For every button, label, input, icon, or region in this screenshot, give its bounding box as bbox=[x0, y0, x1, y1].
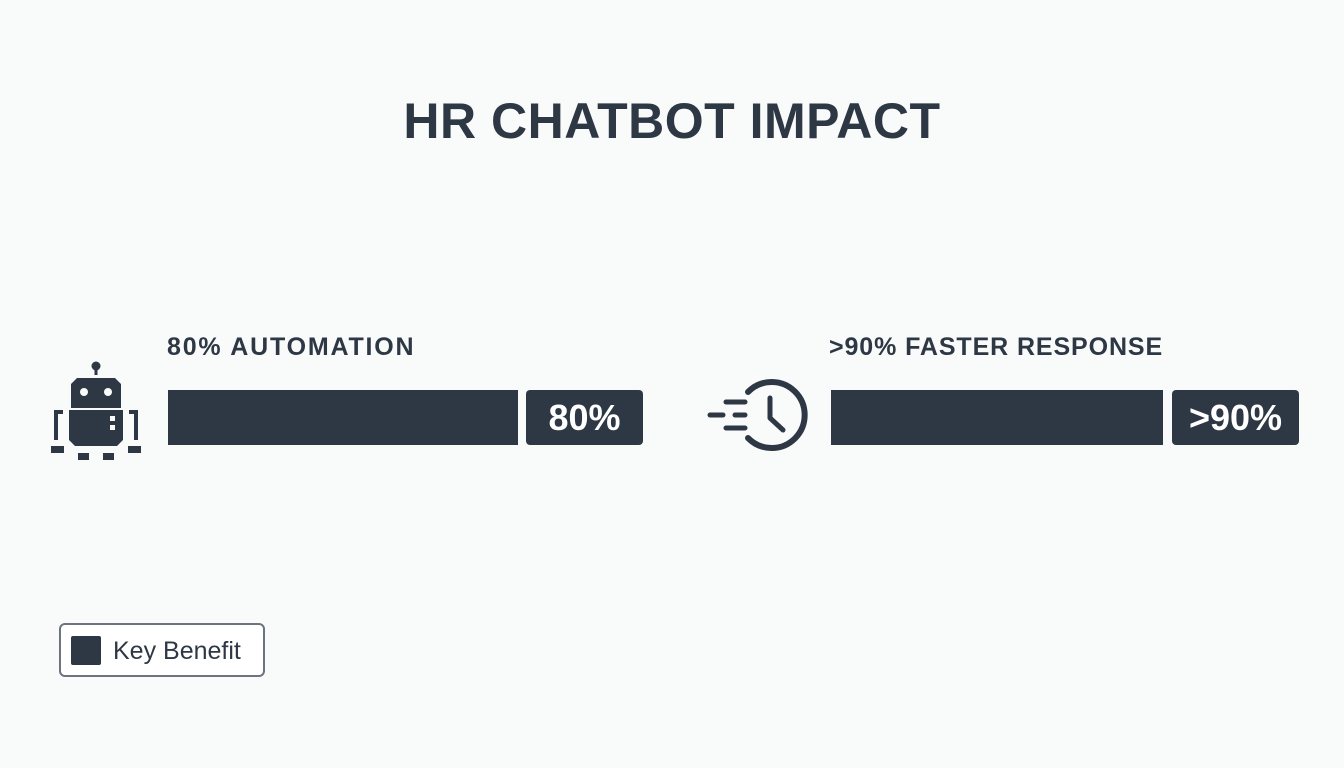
panel: faster response bbox=[708, 333, 1299, 451]
bar: automation bbox=[168, 390, 518, 445]
bar: faster response bbox=[831, 390, 1163, 445]
title: HR CHATBOT IMPACT bbox=[403, 93, 941, 149]
value label: >90%: >90% bbox=[1189, 397, 1282, 438]
legend text: Key Benefit bbox=[113, 637, 241, 665]
heading: faster response: >90% FASTER RESPONSE bbox=[829, 333, 1163, 361]
panel: automation bbox=[51, 333, 643, 460]
value label: 80%: 80% bbox=[548, 397, 621, 438]
value label: >90% bbox=[1172, 390, 1299, 445]
legend swatch bbox=[71, 636, 101, 665]
value label: 80% bbox=[526, 390, 643, 445]
icon: fast clock bbox=[708, 379, 808, 451]
icon: robot bbox=[51, 362, 141, 460]
legend bbox=[59, 623, 265, 677]
heading: automation: 80% AUTOMATION bbox=[167, 333, 415, 361]
